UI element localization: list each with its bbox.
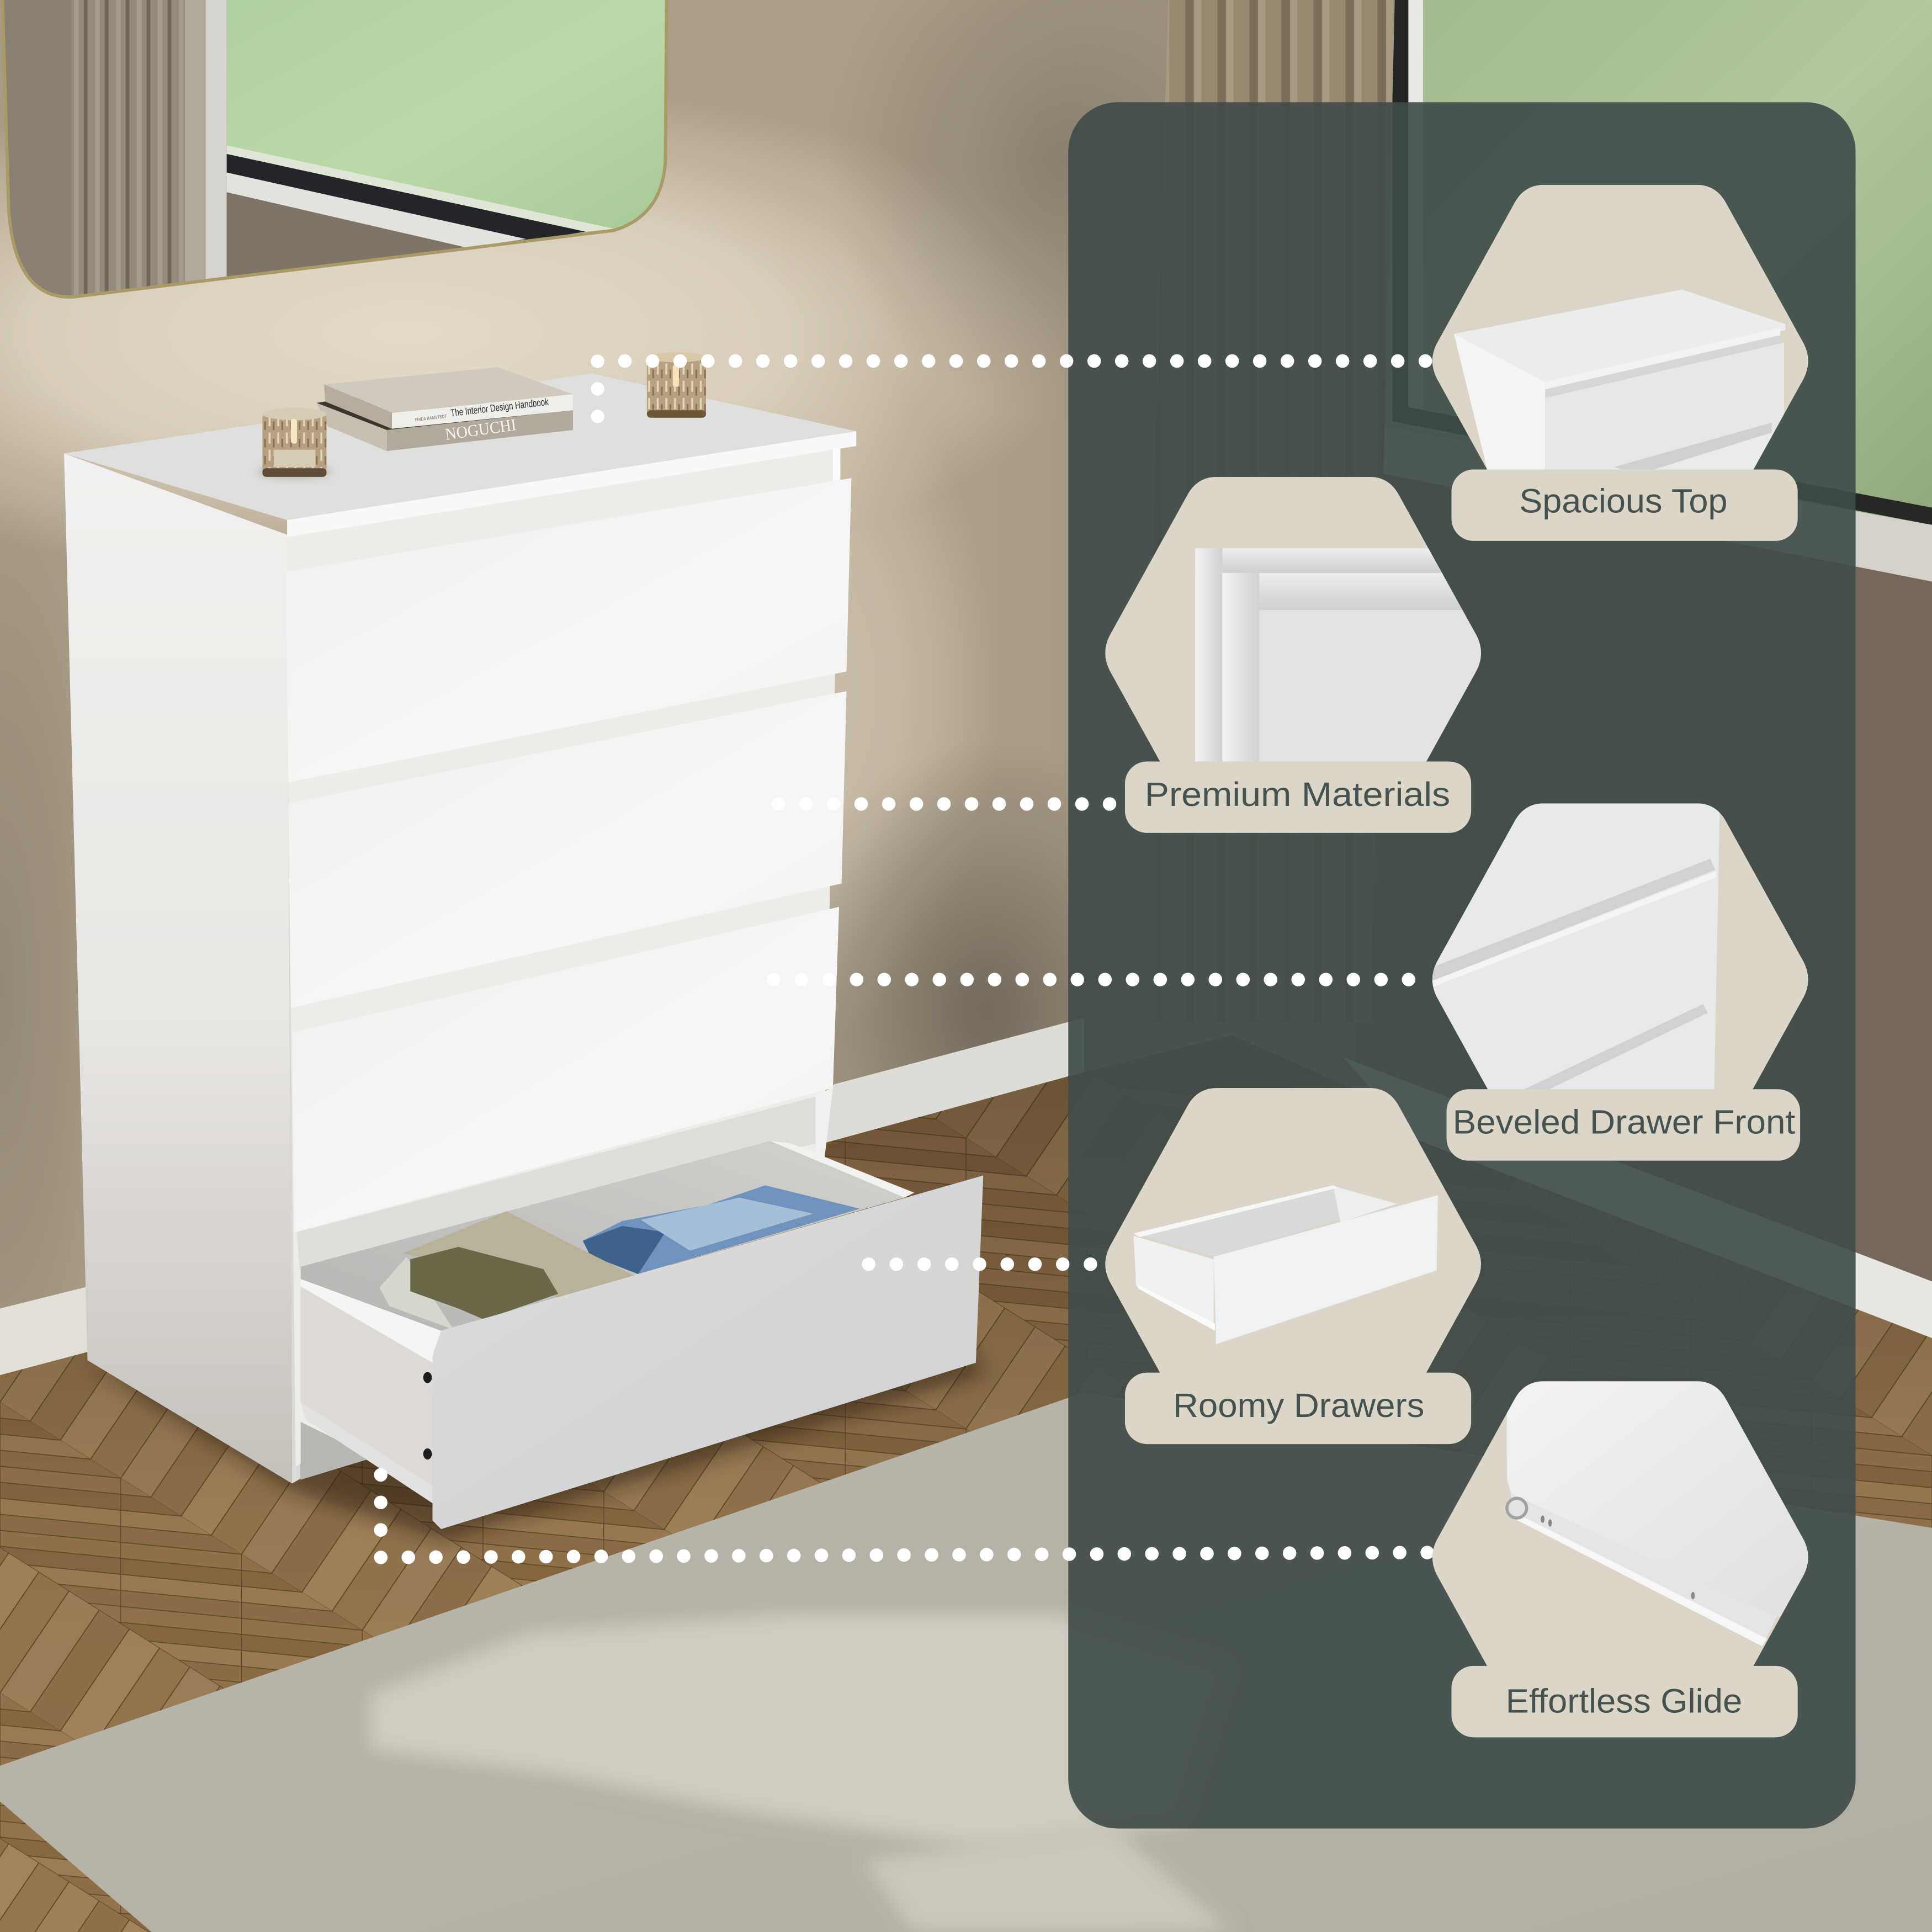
candle right <box>647 352 706 418</box>
dresser top surface <box>64 373 856 520</box>
connector dots: beveled drawer front <box>774 976 1417 983</box>
top front lip <box>287 431 856 537</box>
book titles: FRIDA RAMSTEDT <box>415 413 447 422</box>
drawer 2 <box>288 691 846 1008</box>
connector dots: spacious top <box>598 361 1429 416</box>
floor shadow <box>86 1343 986 1540</box>
bottom book <box>317 403 573 451</box>
open drawer front <box>432 1175 983 1529</box>
candle left <box>258 408 331 479</box>
dresser front edge <box>287 535 301 1484</box>
label text: premium materials: Premium Materials <box>1145 776 1450 814</box>
feature: premium materials <box>1090 468 1497 850</box>
label: premium materials <box>1125 761 1471 833</box>
hexagon with drawer front detail <box>1432 803 1808 1090</box>
drawer side wall <box>301 1281 432 1488</box>
hexagon with layered panels detail <box>1105 477 1481 762</box>
feature: roomy drawers <box>1105 1088 1481 1444</box>
window with greenery <box>1355 0 1932 1281</box>
drawer 3 <box>292 907 839 1232</box>
curtain <box>1140 0 1395 1023</box>
area rug <box>0 1392 1932 1932</box>
label text: beveled drawer front: Beveled Drawer Front <box>1453 1103 1795 1142</box>
drawer slide rail <box>301 1402 432 1503</box>
label: effortless glide <box>1451 1666 1798 1737</box>
label: spacious top <box>1451 469 1798 541</box>
drawer screw holes <box>423 1372 432 1459</box>
drawer 1 <box>286 478 851 782</box>
connector dots: roomy drawers <box>869 1261 1094 1267</box>
plinth <box>301 1422 373 1480</box>
dresser with open bottom drawer <box>64 352 986 1540</box>
clothes <box>377 1185 860 1353</box>
label text: effortless glide: Effortless Glide <box>1506 1682 1742 1721</box>
label: beveled drawer front <box>1447 1089 1800 1161</box>
feature: effortless glide <box>1417 1368 1824 1750</box>
lower rail <box>297 1097 816 1269</box>
carcass front <box>286 448 840 1466</box>
label text: roomy drawers: Roomy Drawers <box>1173 1387 1424 1425</box>
top book <box>324 367 573 413</box>
books <box>317 367 573 451</box>
hexagon background <box>1105 1088 1481 1440</box>
books: The Interior Design Handbook <box>450 396 549 418</box>
hexagon with drawer slide detail <box>1417 1368 1824 1750</box>
drawer interior <box>301 1141 904 1358</box>
drawer rim <box>301 1279 441 1363</box>
dresser side <box>64 453 292 1484</box>
connector dots: premium materials <box>778 801 1115 807</box>
baseboards <box>0 1018 1932 1375</box>
hexagon with dresser top detail <box>1432 184 1808 469</box>
wall mirror with window reflection <box>0 0 672 302</box>
feature: spacious top <box>1417 172 1824 554</box>
connector dots: effortless glide <box>381 1475 1432 1557</box>
empty drawer detail <box>1134 1185 1438 1344</box>
books: NOGUCHI <box>444 415 517 444</box>
panel: feature backdrop <box>1068 102 1856 1829</box>
wood herringbone floor <box>0 1035 1932 1932</box>
label text: spacious top: Spacious Top <box>1519 482 1727 521</box>
feature: beveled drawer front <box>1417 789 1824 1171</box>
label: roomy drawers <box>1125 1373 1471 1444</box>
